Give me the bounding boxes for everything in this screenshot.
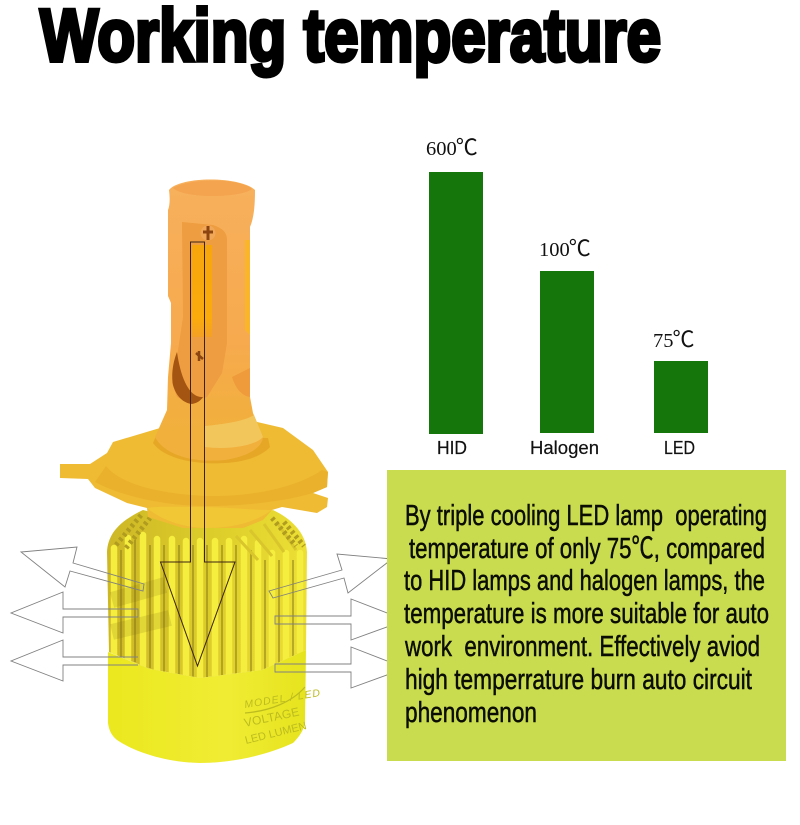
bulb heat sink fins bbox=[107, 510, 307, 678]
description text: phenomenon bbox=[405, 697, 537, 729]
bar: Halogen bbox=[530, 231, 599, 458]
arrows: heat dissipation right bbox=[269, 554, 395, 688]
bar: LED: 75℃ bbox=[653, 322, 695, 354]
screws bbox=[194, 226, 216, 361]
bulb mounting flange bbox=[60, 421, 328, 528]
bar: HID bbox=[426, 130, 483, 458]
bulb lower cap with label: MODEL / LED bbox=[244, 687, 322, 711]
bulb tube bbox=[155, 180, 263, 461]
bar: HID: 600℃ bbox=[426, 130, 478, 162]
bar: Halogen: 100℃ bbox=[539, 231, 591, 263]
bulb lower cap with label: LED LUMEN bbox=[244, 720, 308, 747]
bar chart bbox=[426, 130, 708, 458]
bulb lower cap with label bbox=[108, 650, 322, 763]
description text bbox=[404, 500, 769, 729]
arrows: heat dissipation left bbox=[11, 547, 144, 681]
bar: LED: LED bbox=[664, 438, 695, 458]
illustration: LED bulb bbox=[11, 180, 395, 763]
bar: Halogen: Halogen bbox=[530, 438, 599, 458]
panel: description bbox=[387, 470, 786, 761]
bar: HID: HID bbox=[437, 438, 467, 458]
bar: LED bbox=[653, 322, 708, 458]
bulb lower cap with label: VOLTAGE bbox=[243, 705, 301, 730]
arrow: heat conduction down bbox=[160, 242, 235, 666]
